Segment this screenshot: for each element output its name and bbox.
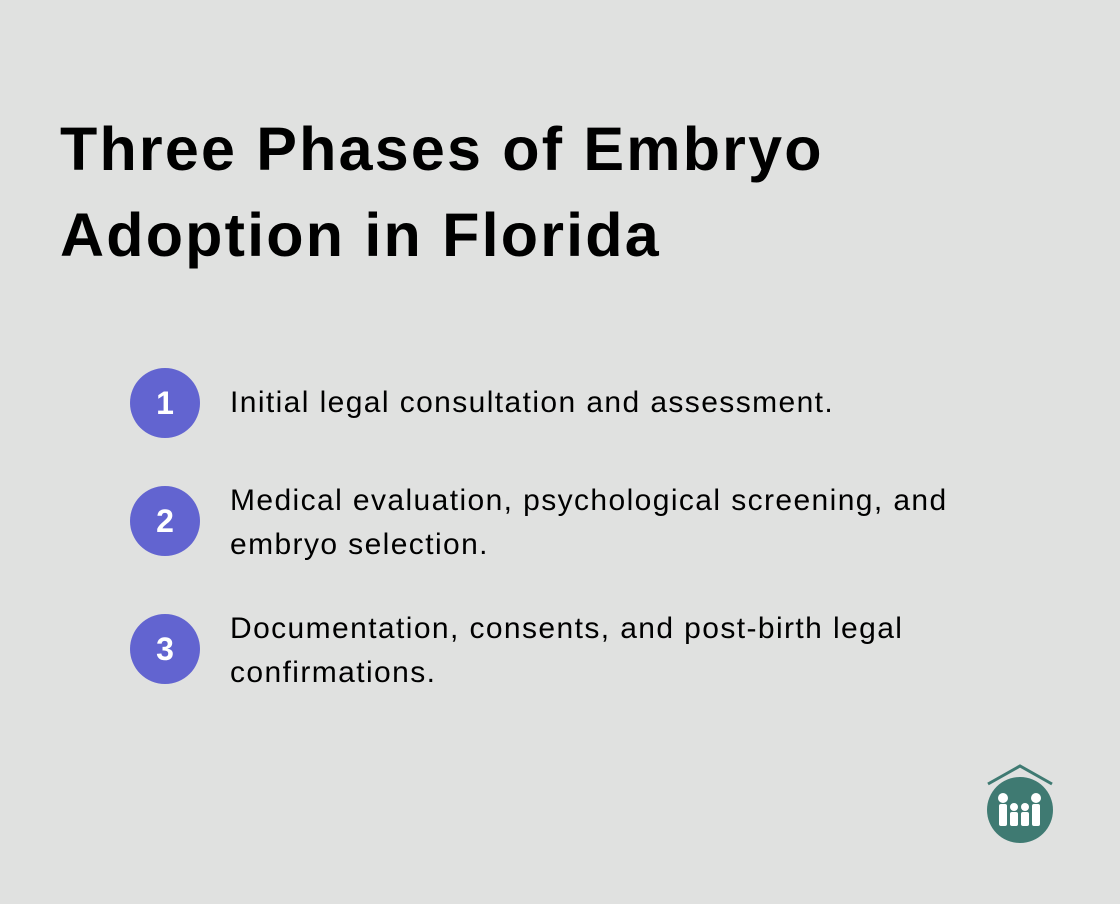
step 2 — [130, 484, 948, 561]
badge 1 — [130, 368, 200, 438]
text 3: Documentation, consents, and post-birth legal confirmations. — [230, 612, 903, 689]
badge 3: 3 — [156, 631, 174, 667]
text 1: Initial legal consultation and assessment. — [230, 386, 834, 419]
badge 1: 1 — [156, 385, 174, 421]
step 3 — [130, 612, 903, 689]
step 1 — [130, 368, 834, 438]
icon: logo house family — [987, 764, 1053, 843]
badge 2: 2 — [156, 503, 174, 539]
badge 2 — [130, 486, 200, 556]
title: Three Phases of Embryo — [60, 115, 824, 183]
badge 3 — [130, 614, 200, 684]
title — [60, 115, 824, 269]
text 2: Medical evaluation, psychological screening, and embryo selection. — [230, 484, 948, 561]
title: Adoption in Florida — [60, 201, 661, 269]
